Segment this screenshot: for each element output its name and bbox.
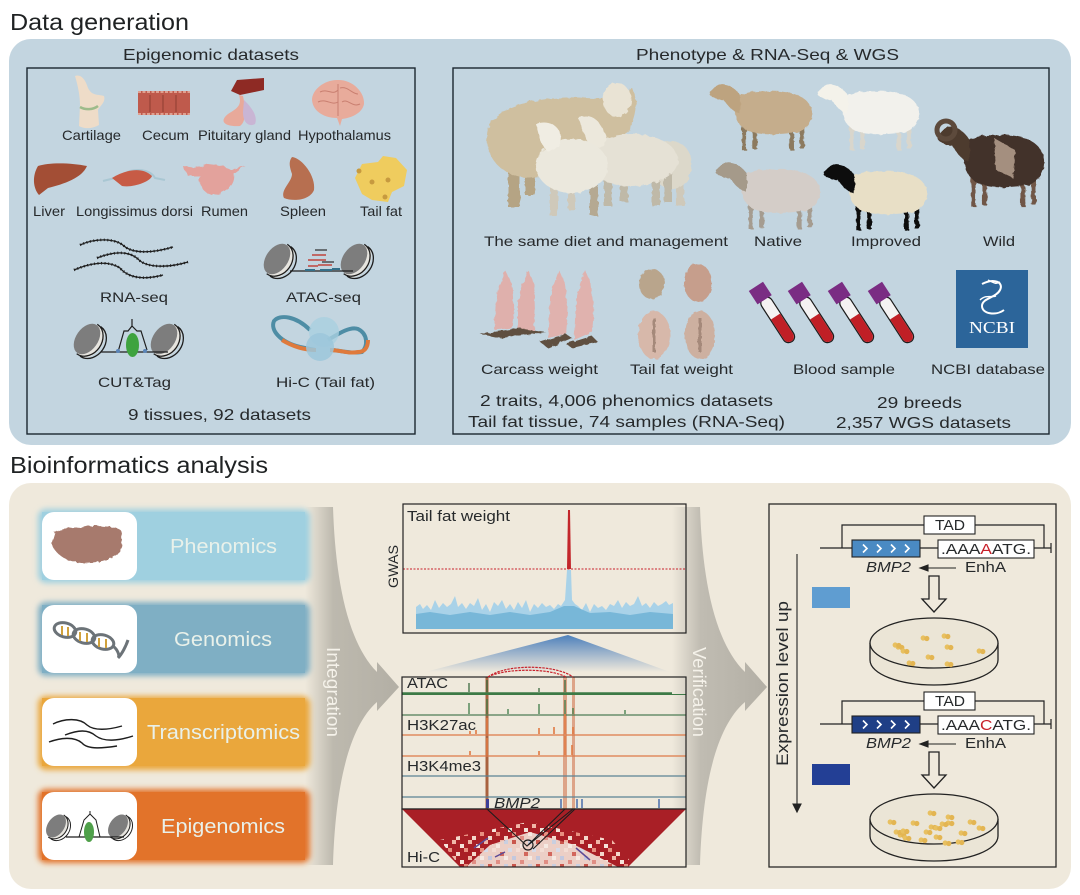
chart: epigenomic tracks — [402, 675, 686, 812]
label: Cartilage: Cartilage — [62, 127, 121, 143]
omics: Genomics: Genomics — [174, 629, 272, 651]
label: Tail fat: Tail fat — [360, 203, 402, 219]
illustration: sheep group under the same diet — [487, 83, 692, 216]
label: Improved: Improved — [851, 233, 921, 249]
label: Blood sample: Blood sample — [793, 361, 895, 377]
label: H3K4me3: H3K4me3 — [407, 758, 481, 775]
label: Tail fat weight: Tail fat weight — [407, 508, 511, 525]
legend: lower expression — [812, 587, 850, 608]
panel: epigenomic datasets — [27, 68, 415, 434]
icon: ATAC-seq — [258, 238, 380, 285]
icon: RNA strands — [74, 240, 188, 278]
omics: Transcriptomics — [38, 696, 310, 770]
arrow: Verification — [672, 507, 767, 865]
icon: DNA helix — [53, 620, 128, 658]
label: Hi-C (Tail fat): Hi-C (Tail fat) — [276, 374, 375, 390]
icon: longissimus dorsi muscle — [103, 170, 165, 186]
arrow: down to dish 2 — [922, 752, 946, 788]
icon: hypothalamus brain — [312, 80, 364, 126]
panel: data generation — [9, 39, 1071, 445]
construct: EnhA A allele: TAD — [935, 517, 965, 534]
panel: functional verification — [769, 504, 1056, 867]
heading: Epigenomic datasets: Epigenomic datasets — [123, 47, 299, 64]
icon: spleen — [283, 157, 314, 200]
illustration: native sheep, tan — [709, 85, 812, 150]
omics: Epigenomics: Epigenomics — [161, 816, 285, 838]
summary: breeds and WGS counts — [836, 395, 1011, 432]
loop arcs — [488, 667, 573, 677]
axis label: Expression level up: Expression level up — [773, 601, 792, 766]
icon: tail fat — [355, 156, 407, 202]
logo: NCBI — [956, 270, 1028, 348]
icon: rumen — [183, 164, 245, 195]
heading: Bioinformatics analysis: Bioinformatics analysis — [10, 452, 268, 478]
label: Hypothalamus: Hypothalamus — [298, 127, 391, 143]
label: Native: Native — [754, 233, 802, 249]
dish: fewer colonies — [870, 618, 998, 685]
zoom wedge — [425, 635, 670, 672]
icon: CUT&amp;Tag nucleosomes — [41, 810, 137, 845]
gene models — [561, 799, 659, 808]
label: NCBI database: NCBI database — [931, 361, 1045, 377]
icon: Hi-C chromatin loop — [273, 317, 368, 361]
construct: EnhA A allele: BMP2 — [866, 559, 912, 576]
logo: NCBI: NCBI — [969, 318, 1015, 337]
heading: Data generation: Data generation — [10, 9, 189, 35]
construct: EnhA A allele: .AAA AATG. — [941, 541, 1031, 558]
summary: breeds and WGS counts: 2,357 WGS datasets — [836, 415, 1011, 432]
summary: phenomics and RNA-Seq counts — [468, 393, 785, 431]
icon: RNA strands — [49, 720, 133, 748]
label: H3K27ac: H3K27ac — [407, 717, 477, 734]
label: BMP2: BMP2 — [494, 795, 541, 812]
icon: liver — [34, 163, 87, 195]
dish: more colonies — [870, 794, 998, 861]
axis label: GWAS: GWAS — [385, 545, 401, 588]
legend: higher expression — [812, 764, 850, 785]
icon: CUT&amp;Tag — [68, 318, 190, 365]
summary: 9 tissues, 92 datasets: 9 tissues, 92 datasets — [128, 407, 311, 424]
icon: blood sample tubes — [749, 282, 918, 346]
label: Spleen: Spleen — [280, 203, 326, 219]
arrow: Integration: Integration — [323, 647, 343, 737]
omics: Phenomics — [38, 509, 310, 583]
construct: EnhA A allele: EnhA — [965, 559, 1006, 576]
icon: tail fat tissue — [52, 526, 122, 563]
panel: phenotype, RNA-Seq, WGS — [453, 68, 1049, 434]
label: Wild: Wild — [983, 233, 1015, 249]
panel: bioinformatics analysis — [9, 483, 1071, 889]
omics: Phenomics: Phenomics — [170, 536, 277, 558]
icon: pituitary gland — [224, 78, 264, 126]
label: Hi-C: Hi-C — [407, 849, 440, 866]
construct: EnhA C allele: .AAA CATG. — [941, 717, 1031, 734]
summary: phenomics and RNA-Seq counts: Tail fat tissue, 74 samples (RNA-Seq) — [468, 414, 785, 431]
label: RNA-seq: RNA-seq — [100, 289, 168, 305]
summary: breeds and WGS counts: 29 breeds — [877, 395, 962, 412]
arrow: Integration — [305, 507, 399, 865]
icon: cecum — [138, 91, 190, 115]
illustration: improved sheep, white — [817, 85, 919, 150]
chart: GWAS Manhattan plot — [403, 504, 686, 633]
label: Cecum: Cecum — [142, 127, 189, 143]
label: Rumen: Rumen — [201, 203, 248, 219]
track lines and peaks — [402, 680, 686, 797]
label: Liver: Liver — [33, 203, 65, 219]
chart: Hi-C heatmap — [402, 809, 686, 867]
illustration: tail fat samples — [638, 264, 715, 359]
label: Longissimus dorsi: Longissimus dorsi — [76, 203, 193, 219]
construct: EnhA A allele — [820, 516, 1051, 576]
summary: phenomics and RNA-Seq counts: 2 traits, 4,006 phenomics datasets — [480, 393, 773, 410]
label: Carcass weight: Carcass weight — [481, 361, 598, 377]
arrow: Verification: Verification — [689, 647, 709, 737]
construct: EnhA C allele: TAD — [935, 693, 965, 710]
omics: Genomics — [38, 602, 310, 676]
illustration: improved black-faced sheep — [823, 165, 927, 230]
arrow: down to dish 1 — [922, 576, 946, 612]
illustration: carcasses — [480, 270, 598, 348]
label: CUT&amp;Tag: CUT&Tag — [98, 374, 171, 390]
illustration: wild sheep — [937, 121, 1044, 207]
construct: EnhA C allele — [820, 692, 1051, 752]
construct: EnhA C allele: BMP2 — [866, 735, 912, 752]
omics: Transcriptomics: Transcriptomics — [147, 722, 300, 744]
arrow: expression direction — [793, 554, 801, 812]
illustration: native ram — [715, 163, 820, 229]
label: ATAC-seq: ATAC-seq — [286, 289, 361, 305]
omics: Epigenomics — [38, 789, 310, 863]
construct: EnhA C allele: EnhA — [965, 735, 1006, 752]
label: Tail fat weight: Tail fat weight — [630, 361, 733, 377]
heading: Phenotype & RNA-Seq & WGS: Phenotype & RNA-Seq & WGS — [636, 47, 899, 64]
label: The same diet and management: The same diet and management — [484, 233, 728, 249]
label: ATAC: ATAC — [407, 675, 448, 692]
label: Pituitary gland: Pituitary gland — [198, 127, 291, 143]
icon: cartilage — [75, 76, 104, 128]
